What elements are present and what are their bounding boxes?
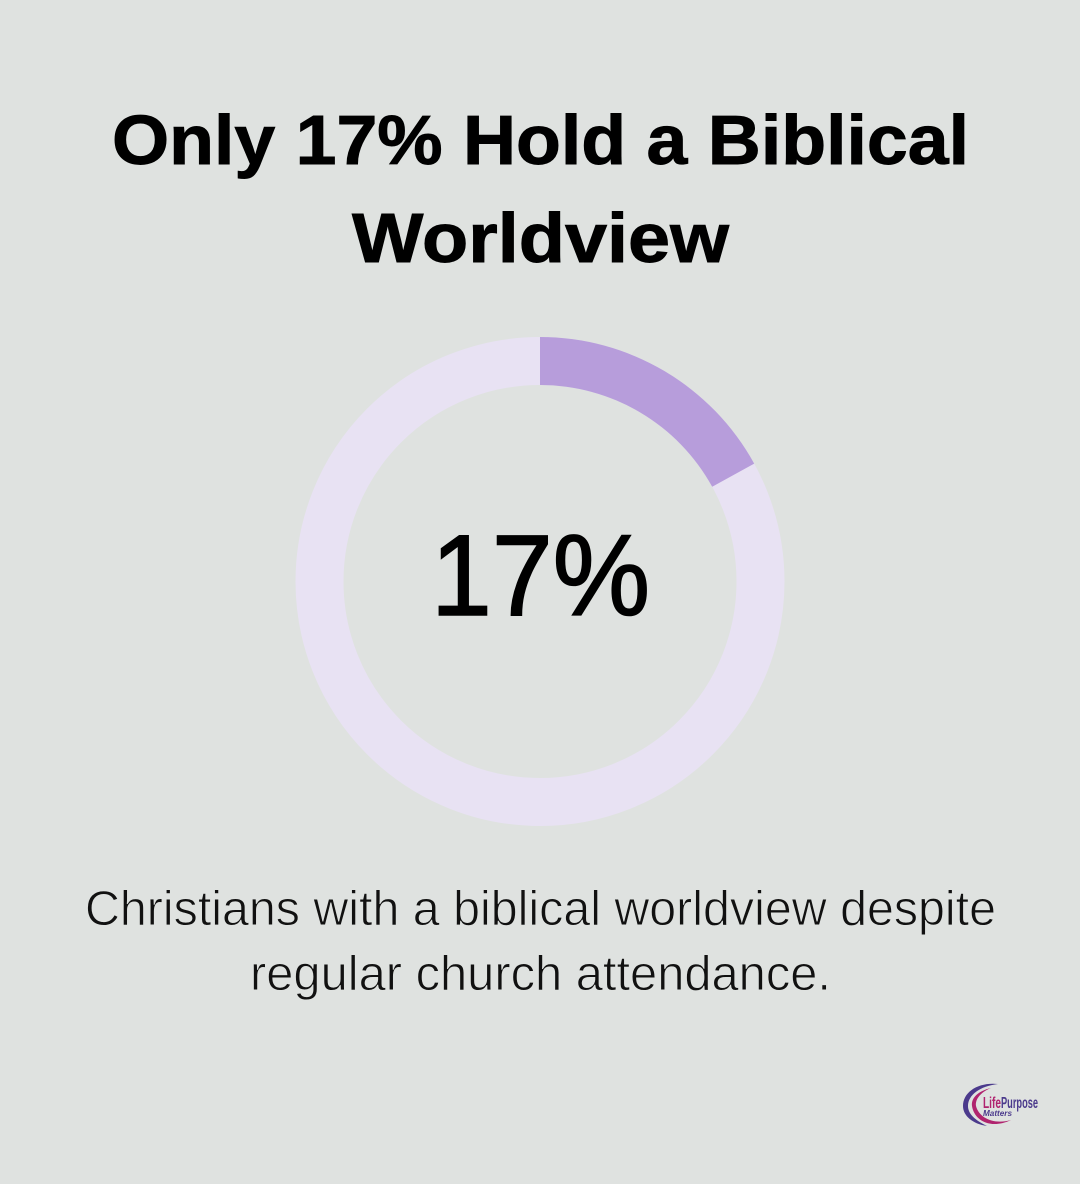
description: [85, 882, 996, 1001]
title: Only 17% Hold a Biblical: [112, 101, 969, 179]
description: regular church attendance.: [250, 947, 831, 1001]
logo wordmark: Life: [983, 1095, 1001, 1112]
logo wordmark: Matters: [983, 1109, 1013, 1118]
donut segment: 17%: [540, 337, 754, 487]
donut track: [320, 361, 760, 802]
logo wordmark: Purpose: [1001, 1095, 1038, 1112]
center value: 17%: [431, 512, 650, 640]
title: Worldview: [352, 199, 730, 277]
title: [112, 101, 969, 277]
logo outer arc: [963, 1084, 998, 1126]
logo inner arc: [972, 1088, 1011, 1124]
description: Christians with a biblical worldview despite: [85, 882, 996, 936]
logo: Life Purpose Matters: [963, 1084, 1038, 1126]
donut chart: 17%: [320, 337, 760, 802]
logo wordmark: [983, 1095, 1038, 1118]
